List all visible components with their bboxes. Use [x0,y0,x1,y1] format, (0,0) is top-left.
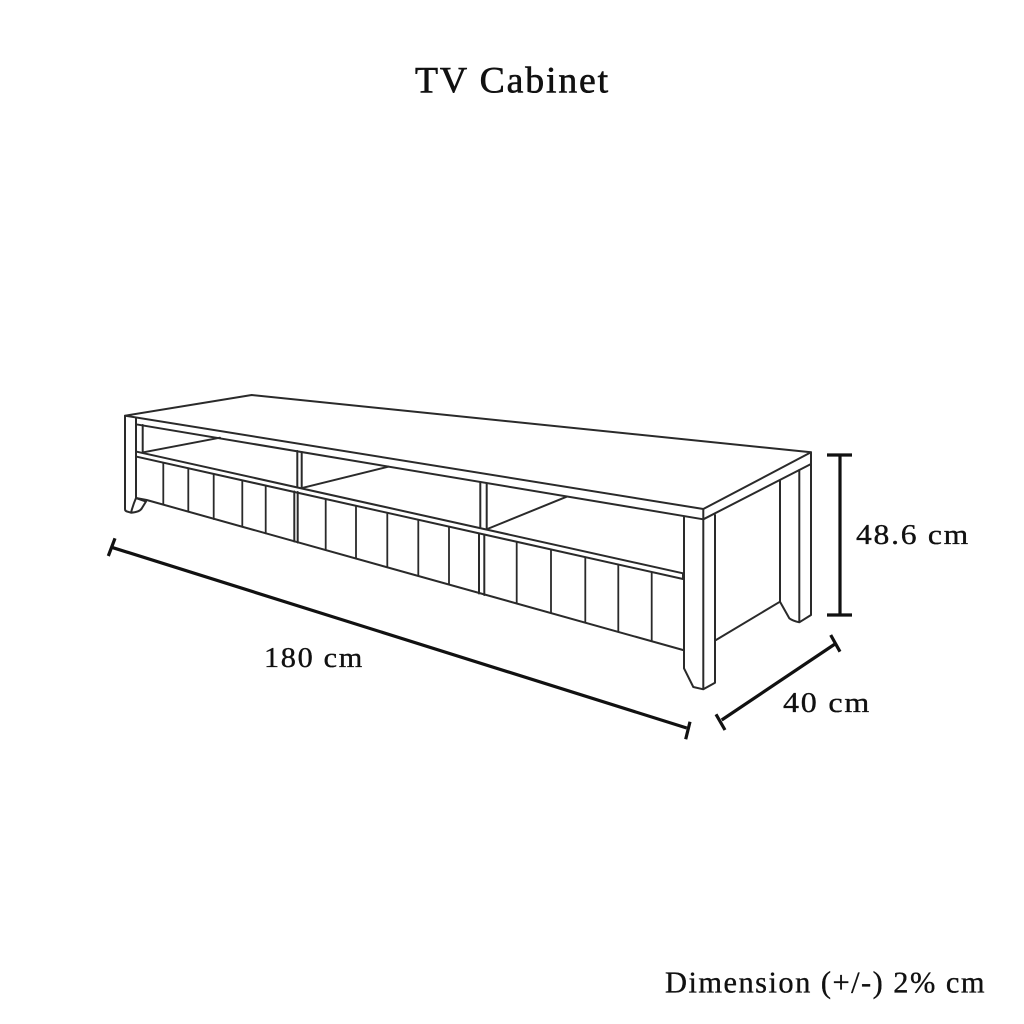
table top surface [125,395,811,519]
depth dimension marker [716,635,840,730]
drawer front bottom edge [136,498,683,650]
drawer plank grooves [163,463,652,641]
length label: 180 cm [264,642,364,674]
drawer divider posts [294,492,484,595]
tolerance note: Dimension (+/-) 2% cm [665,964,986,1000]
front right leg [684,515,715,689]
open shelf compartments [137,425,683,579]
side panel bottom edge [716,602,780,640]
height dimension marker [827,455,852,615]
left end leg [125,416,146,513]
height label: 48.6 cm [856,519,970,551]
back right leg [780,464,811,622]
length dimension marker [108,538,690,739]
title: TV Cabinet [415,60,610,102]
cabinet line drawing [125,395,811,689]
depth label: 40 cm [783,687,871,719]
